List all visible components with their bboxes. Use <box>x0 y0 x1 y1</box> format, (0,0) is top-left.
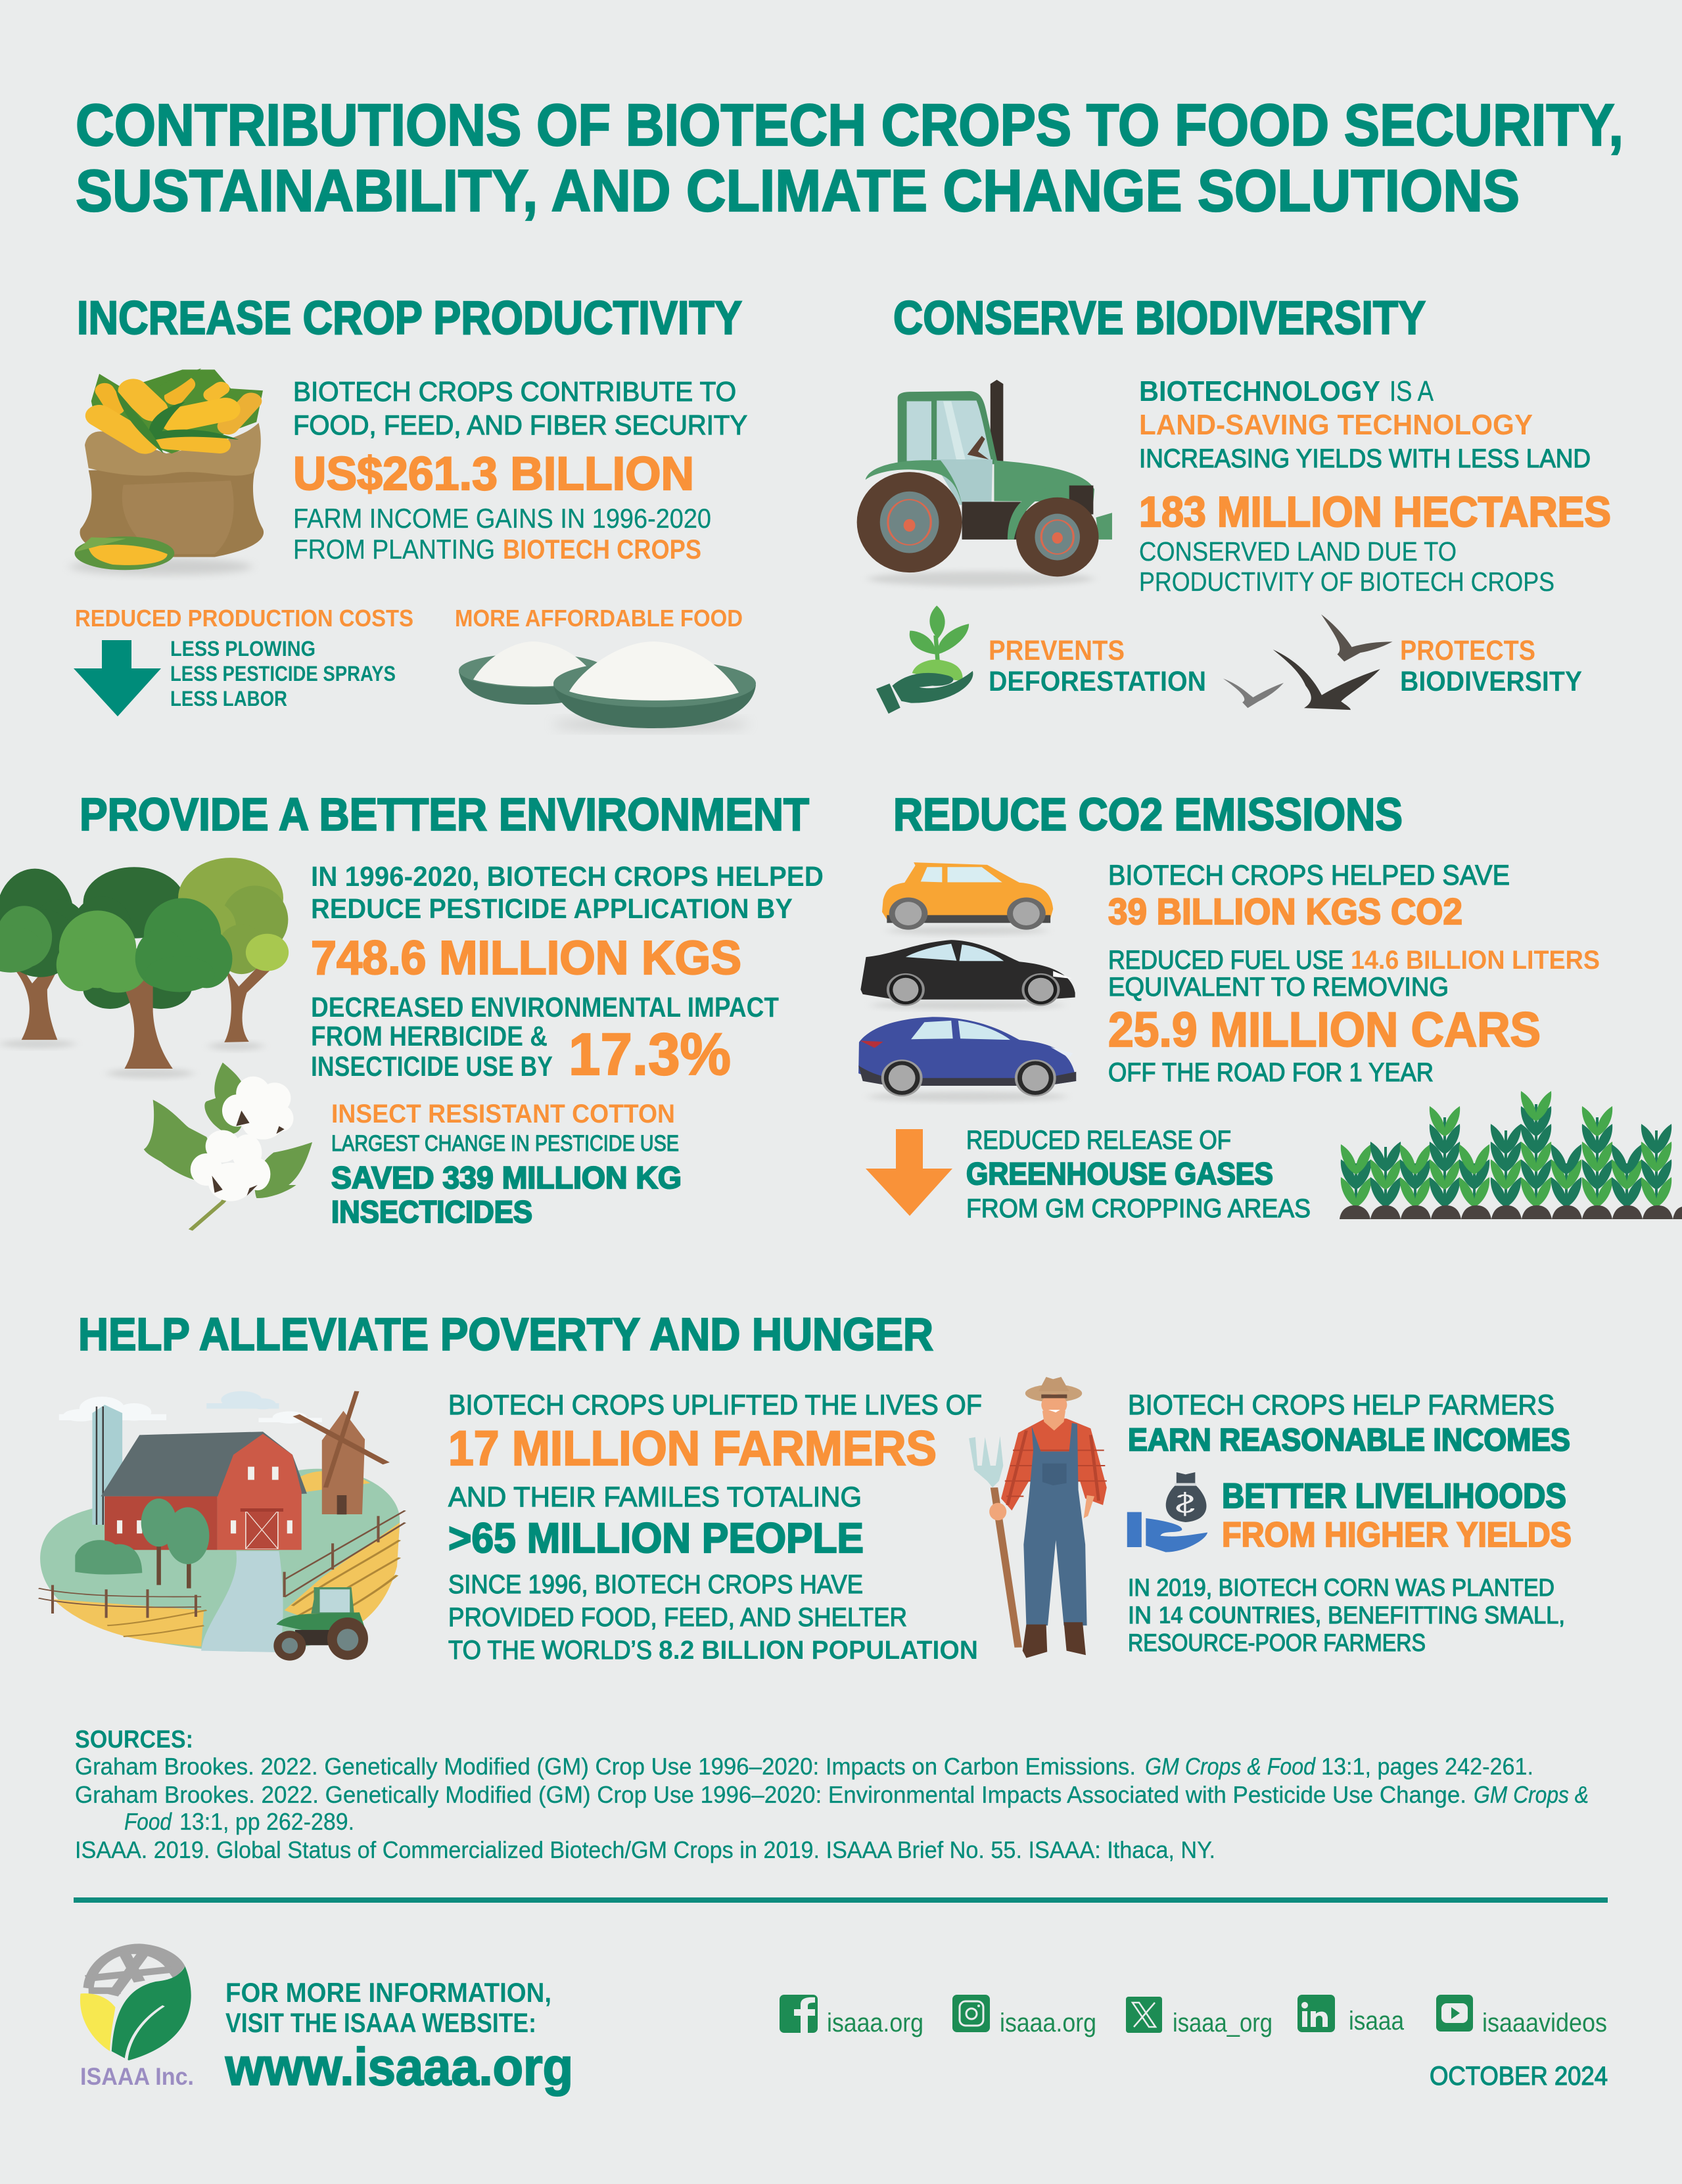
text: reduce pesticide application: REDUCE PESTICIDE APPLICATION BY <box>311 893 793 925</box>
icon: money bag and hand <box>1127 1472 1207 1552</box>
label: more affordable food: MORE AFFORDABLE FOOD <box>455 605 743 632</box>
arrow: down orange <box>866 1129 952 1216</box>
text: reduced fuel use: EQUIVALENT TO REMOVING <box>1108 973 1449 1002</box>
text: protects biodiversity: BIODIVERSITY <box>1400 666 1582 697</box>
icon: instagram <box>952 1995 990 2032</box>
panel: increase crop productivity <box>70 292 756 731</box>
panel: help alleviate poverty and hunger <box>39 1309 1572 1665</box>
text: protects biodiversity <box>1400 635 1582 697</box>
text: biotech corn planted <box>1128 1574 1565 1656</box>
text: reduce pesticide application: IN 1996-2020, BIOTECH CROPS HELPED <box>311 861 824 893</box>
text: decreased environmental impact: DECREASED ENVIRONMENTAL IMPACT <box>311 992 779 1023</box>
icon: rice bowls <box>459 641 756 731</box>
text: biotechnology land saving: BIOTECHNOLOGY <box>1139 375 1380 407</box>
text: since 1996: TO THE WORLD’S <box>448 1636 652 1665</box>
number: 183 million hectares: 183 MILLION HECTARES <box>1139 488 1611 536</box>
text: reduced fuel use: 14.6 BILLION LITERS <box>1351 946 1600 975</box>
icon: x <box>1126 1997 1162 2033</box>
text: insect resistant cotton <box>331 1100 682 1229</box>
text: biotechnology land saving: INCREASING YIELDS WITH LESS LAND <box>1139 444 1591 473</box>
icon: crop rows <box>1340 1091 1682 1219</box>
icon: facebook <box>780 1995 818 2033</box>
text: reduce pesticide application <box>311 861 824 925</box>
title <box>76 93 1624 224</box>
handle: linkedin: isaaa <box>1349 2007 1405 2035</box>
text: greenhouse gases: REDUCED RELEASE OF <box>966 1126 1231 1155</box>
list: less plowing, pesticide, labor: LESS PESTICIDE SPRAYS <box>170 662 396 685</box>
text: for more information: FOR MORE INFORMATION, <box>225 1977 551 2008</box>
text: prevents deforestation <box>989 635 1206 697</box>
text: prevents deforestation: PREVENTS <box>989 635 1125 666</box>
text: biotechnology land saving: LAND-SAVING TECHNOLOGY <box>1139 409 1533 441</box>
number: 25.9 million cars: 25.9 MILLION CARS <box>1108 1002 1541 1057</box>
text: greenhouse gases: FROM GM CROPPING AREAS <box>966 1194 1311 1223</box>
heading: reduce co2 emissions: REDUCE CO2 EMISSIONS <box>893 789 1403 840</box>
sources: Graham Brookes. 2022. Genetically Modified (GM) Crop Use 1996–2020: Environmental Impacts Associated with Pesticide Use Change. <box>75 1781 1466 1808</box>
icon: green tractor <box>857 380 1112 586</box>
text: help farmers earn <box>1128 1389 1570 1458</box>
label: reduced production costs: REDUCED PRODUCTION COSTS <box>75 605 413 632</box>
icon: trees <box>0 858 289 1079</box>
text: better livelihoods: BETTER LIVELIHOODS <box>1222 1477 1566 1516</box>
text: decreased environmental impact <box>311 992 779 1082</box>
number: US$261.3 billion: US$261.3 BILLION <box>293 448 694 500</box>
title: SUSTAINABILITY, AND CLIMATE CHANGE SOLUTIONS <box>76 158 1520 224</box>
text: since 1996: 8.2 BILLION POPULATION <box>659 1636 978 1665</box>
logo: ISAAA: ISAAA Inc. <box>80 2063 194 2090</box>
text: conserved land: CONSERVED LAND DUE TO <box>1139 536 1457 567</box>
text: and their families: AND THEIR FAMILES TOTALING <box>448 1481 862 1513</box>
text: biotechnology land saving <box>1139 375 1591 473</box>
text: decreased environmental impact: FROM HERBICIDE & <box>311 1021 548 1052</box>
handle: instagram: isaaa.org <box>1000 2009 1096 2037</box>
handle: facebook: isaaa.org <box>827 2009 923 2037</box>
heading: help alleviate poverty and hunger: HELP ALLEVIATE POVERTY AND HUNGER <box>78 1309 933 1360</box>
heading: increase crop productivity: INCREASE CROP PRODUCTIVITY <box>77 292 742 344</box>
sources: Graham Brookes. 2022. Genetically Modified (GM) Crop Use 1996–2020: Impacts on Carbon Emissions. <box>75 1753 1136 1780</box>
number: 748.6 million kgs: 748.6 MILLION KGS <box>311 932 741 985</box>
text: for more information: VISIT THE ISAAA WEBSITE: <box>225 2007 536 2038</box>
text: reduced fuel use <box>1108 946 1600 1002</box>
text: farm income gains: BIOTECH CROPS <box>503 534 701 565</box>
number: 17 million farmers: 17 MILLION FARMERS <box>448 1421 937 1475</box>
text: since 1996: PROVIDED FOOD, FEED, AND SHELTER <box>448 1603 907 1632</box>
text: save 39 billion kgs co2: BIOTECH CROPS HELPED SAVE <box>1108 860 1510 891</box>
handle: youtube: isaaavideos <box>1482 2009 1607 2037</box>
sources: 13:1, pages 242-261. <box>1321 1753 1533 1780</box>
text: biotech corn planted: IN <box>1128 1602 1152 1629</box>
icon: cotton plant <box>144 1063 312 1230</box>
text: food feed fiber <box>293 376 747 440</box>
text: better livelihoods <box>1222 1477 1572 1554</box>
date: OCTOBER 2024 <box>1430 2062 1608 2091</box>
list: less plowing, pesticide, labor <box>170 637 396 710</box>
text: insect resistant cotton: INSECTICIDES <box>331 1194 532 1229</box>
text: prevents deforestation: DEFORESTATION <box>989 666 1206 697</box>
website url: www.isaaa.org <box>225 2037 573 2096</box>
panel: conserve biodiversity <box>857 292 1611 714</box>
text: better livelihoods: FROM HIGHER YIELDS <box>1222 1516 1572 1554</box>
text: help farmers earn: BIOTECH CROPS HELP FARMERS <box>1128 1389 1554 1421</box>
text: biotechnology land saving: IS A <box>1390 375 1434 407</box>
text: save 39 billion kgs co2 <box>1108 860 1510 932</box>
text: greenhouse gases: GREENHOUSE GASES <box>966 1156 1273 1191</box>
panel: provide a better environment <box>0 789 824 1230</box>
panel: reduce co2 emissions <box>858 789 1682 1223</box>
text: conserved land <box>1139 536 1554 597</box>
sources: GM Crops & Food <box>1145 1753 1316 1780</box>
text: insect resistant cotton: INSECT RESISTANT COTTON <box>331 1100 675 1128</box>
sources: 13:1, pp 262-289. <box>179 1808 354 1835</box>
number: 65 million people: >65 MILLION PEOPLE <box>448 1514 864 1562</box>
text: save 39 billion kgs co2: 39 BILLION KGS CO2 <box>1108 891 1462 932</box>
text: biotech corn planted: BENEFITTING SMALL, <box>1328 1602 1565 1629</box>
sources: Food <box>124 1808 172 1835</box>
text: farm income gains: FARM INCOME GAINS IN 1996-2020 <box>293 503 711 534</box>
text: food feed fiber: BIOTECH CROPS CONTRIBUTE TO <box>293 376 736 407</box>
icon: hand with seedling <box>876 605 973 714</box>
text: insect resistant cotton: SAVED 339 MILLION KG <box>331 1160 682 1195</box>
list: less plowing, pesticide, labor: LESS PLOWING <box>170 637 315 661</box>
text: greenhouse gases <box>966 1126 1311 1223</box>
icon: farmer with pitchfork <box>969 1377 1107 1658</box>
icon: corn sack <box>70 368 264 575</box>
text: since 1996: SINCE 1996, BIOTECH CROPS HAVE <box>448 1570 863 1599</box>
sources: ISAAA. 2019. Global Status of Commercialized Biotech/GM Crops in 2019. ISAAA Brief No. 55. ISAAA: Ithaca, NY. <box>75 1836 1215 1863</box>
text: decreased environmental impact: INSECTICIDE USE BY <box>311 1051 553 1082</box>
icon: youtube <box>1436 1995 1473 2032</box>
icon: blue car <box>858 1017 1076 1102</box>
text: insect resistant cotton: LARGEST CHANGE IN PESTICIDE USE <box>331 1131 679 1156</box>
text: biotech corn planted: RESOURCE-POOR FARMERS <box>1128 1629 1426 1656</box>
text: farm income gains: FROM PLANTING <box>293 534 495 565</box>
text: food feed fiber: FOOD, FEED, AND FIBER SECURITY <box>293 409 747 440</box>
text: uplifted lives: BIOTECH CROPS UPLIFTED THE LIVES OF <box>448 1389 982 1421</box>
text: conserved land: PRODUCTIVITY OF BIOTECH CROPS <box>1139 567 1554 597</box>
list: less plowing, pesticide, labor: LESS LABOR <box>170 687 287 710</box>
text: protects biodiversity: PROTECTS <box>1400 635 1535 666</box>
text: biotech corn planted: 14 COUNTRIES, <box>1159 1602 1321 1629</box>
heading: conserve biodiversity: CONSERVE BIODIVERSITY <box>893 292 1426 344</box>
handle: x: isaaa_org <box>1173 2009 1273 2037</box>
icon: black car <box>860 940 1075 1010</box>
arrow: down teal <box>74 640 161 716</box>
text: since 1996 <box>448 1570 978 1665</box>
text: biotech corn planted: IN 2019, BIOTECH CORN WAS PLANTED <box>1128 1574 1554 1601</box>
text: reduced fuel use: REDUCED FUEL USE <box>1108 946 1343 975</box>
heading: provide a better environment: PROVIDE A BETTER ENVIRONMENT <box>80 789 809 840</box>
text: help farmers earn: EARN REASONABLE INCOMES <box>1128 1423 1570 1458</box>
sources: SOURCES: <box>75 1726 193 1754</box>
text: farm income gains <box>293 503 711 565</box>
footer <box>80 1943 1608 2096</box>
sources <box>75 1726 1589 1863</box>
icon: birds <box>1223 615 1393 710</box>
text: for more information <box>225 1977 551 2038</box>
icon: orange car <box>882 862 1053 935</box>
sources: GM Crops & <box>1474 1781 1589 1808</box>
logo: ISAAA <box>80 1943 194 2090</box>
text: off the road: OFF THE ROAD FOR 1 YEAR <box>1108 1058 1434 1087</box>
icon: linkedin <box>1297 1995 1335 2032</box>
number: 17.3%: 17.3% <box>569 1022 731 1088</box>
icon: farm scene <box>39 1391 405 1661</box>
